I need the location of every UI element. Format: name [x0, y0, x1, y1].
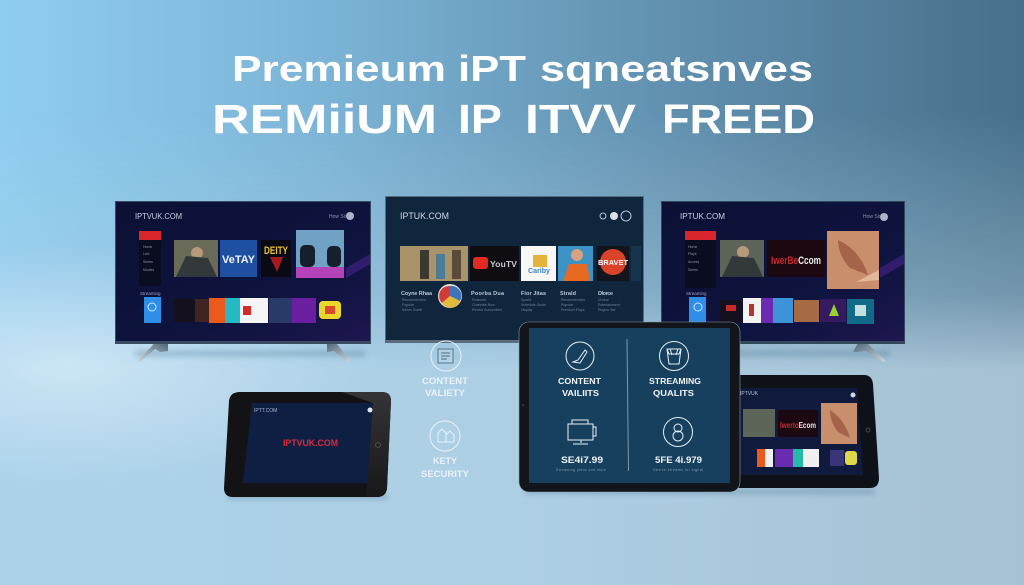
large tablet	[519, 322, 740, 492]
sidebar menu: Home	[143, 245, 152, 249]
sidebar menu: Plays	[688, 252, 697, 256]
icon: security	[430, 421, 460, 451]
label: CONTENT	[558, 376, 602, 386]
title line 2: FREED	[662, 96, 815, 142]
caption: Streaming plans and more	[556, 468, 606, 472]
icon: pencil	[566, 342, 594, 370]
header icons	[600, 211, 631, 221]
featured tiles: IwerBeCcom	[771, 255, 821, 267]
brand text: IPTVUK.COM	[283, 438, 338, 448]
label: SECURITY	[421, 469, 469, 479]
title line 2	[212, 96, 815, 142]
featured tiles	[174, 230, 344, 278]
featured tiles	[720, 231, 879, 289]
feature: price one	[556, 420, 606, 472]
tile captions: Popular	[561, 303, 574, 307]
content tiles: Cariby	[528, 268, 550, 275]
tile captions: Dlorce	[598, 291, 613, 297]
tile captions: Recent Subscribed	[472, 308, 502, 312]
title line 2: REMiiUM	[212, 96, 437, 142]
label: CONTENT	[422, 376, 469, 386]
feature: content vailits	[558, 342, 602, 398]
label	[422, 376, 469, 398]
label: QUALITS	[653, 388, 694, 398]
caption: Device streams for signal	[653, 468, 703, 472]
title line 1	[232, 48, 813, 89]
sidebar menu: Movies	[143, 268, 154, 272]
tile captions	[401, 291, 620, 312]
center TV	[385, 196, 644, 343]
content tiles: IwertoEcom	[780, 421, 816, 430]
apps row: Streaming	[140, 291, 161, 296]
tile captions: Schedule Guide	[521, 303, 546, 307]
apps row: Streaming	[686, 291, 707, 296]
apps row	[757, 449, 857, 467]
tile captions: Series Guide	[402, 308, 422, 312]
label: VALIETY	[425, 388, 465, 398]
floor shadows	[135, 351, 890, 499]
sidebar menu: Series	[143, 260, 153, 264]
tile captions: Display	[521, 308, 533, 312]
right tablet: IPTVUK	[740, 391, 759, 397]
tile captions: Fior Jitas	[521, 291, 546, 297]
tile captions: Recommended	[561, 298, 585, 302]
home button	[866, 428, 870, 432]
sidebar menu: Live	[143, 252, 149, 256]
tile captions: Strald	[560, 291, 576, 297]
TV stands	[137, 343, 351, 362]
sidebar menu: Access	[688, 260, 700, 264]
sidebar menu	[685, 231, 716, 288]
camera	[522, 404, 524, 406]
left tablet	[224, 392, 391, 497]
icon: content variety	[431, 341, 461, 371]
icon: cup	[660, 342, 688, 370]
right TV	[661, 201, 905, 362]
tile captions: Poorba Dua	[471, 291, 505, 297]
feature: streaming qualits	[649, 342, 701, 398]
title line 1: Premieum	[232, 48, 446, 89]
content tiles: BRAVET	[598, 260, 629, 267]
sidebar menu	[139, 231, 161, 286]
floating feature: key security	[421, 421, 469, 479]
tablet screen	[529, 328, 730, 483]
tile captions: Recommended	[402, 298, 426, 302]
title	[212, 48, 815, 142]
screen header: IPTT.COM	[254, 408, 277, 414]
content tiles: YouTV	[490, 260, 518, 269]
featured tiles: DEITY	[264, 245, 288, 257]
left TV: How Six	[329, 214, 348, 220]
home button	[376, 442, 380, 448]
content tiles	[743, 403, 857, 444]
brand: IPTUK.COM	[680, 211, 725, 221]
center floating feature: content variety	[422, 341, 469, 398]
featured tiles: VeTAY	[222, 254, 256, 266]
profile avatar	[438, 284, 462, 308]
title line 2: IP	[458, 96, 502, 142]
price: 5FE 4i.979	[655, 455, 702, 465]
tile captions: Region Set	[598, 308, 615, 312]
label	[558, 376, 602, 398]
tablet screen	[243, 403, 373, 483]
label: STREAMING	[649, 376, 701, 386]
tile captions: Coyne Rhaa	[401, 291, 433, 297]
title line 1: iPT	[458, 48, 526, 89]
tile captions: Popular	[402, 303, 415, 307]
tile captions: Choice	[598, 298, 609, 302]
sidebar menu: Series	[688, 268, 698, 272]
tablet screen	[738, 388, 863, 475]
tile captions: Entertainment	[598, 303, 620, 307]
apps row	[686, 291, 874, 324]
apps row	[140, 291, 341, 323]
icon: monitor	[568, 420, 596, 444]
icon: number 8	[664, 418, 692, 446]
divider	[627, 339, 628, 471]
label: KETY	[433, 456, 457, 466]
title line 1: sqneatsnves	[540, 48, 813, 89]
TV stand	[853, 343, 886, 362]
label	[421, 456, 469, 479]
tile captions: Sports	[521, 298, 531, 302]
brand: IPTVUK.COM	[135, 211, 182, 221]
feature: price two	[653, 418, 703, 472]
label: VAILIITS	[562, 388, 599, 398]
right tablet	[735, 375, 879, 488]
price: SE4i7.99	[561, 455, 603, 465]
right TV: How Six	[863, 214, 882, 220]
sidebar menu: Home	[688, 245, 697, 249]
title line 2: ITVV	[525, 96, 637, 142]
tile captions: Premium Plays	[561, 308, 585, 312]
label	[649, 376, 701, 398]
tile captions: Featured	[472, 298, 486, 302]
content tiles	[400, 246, 641, 281]
left TV	[115, 201, 371, 362]
tile captions: Channels Now	[472, 303, 495, 307]
brand: IPTUK.COM	[400, 211, 449, 221]
